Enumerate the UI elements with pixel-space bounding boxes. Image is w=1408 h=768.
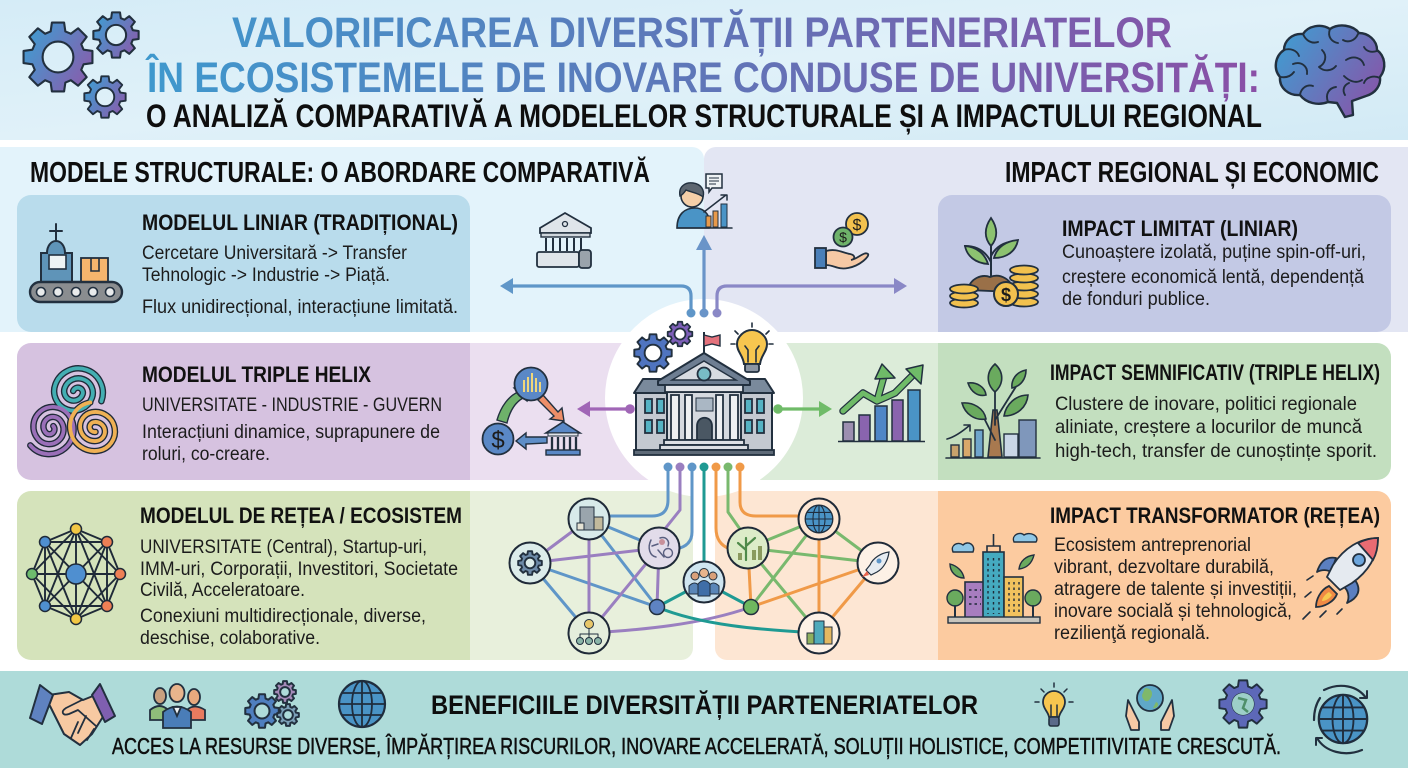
panel: transformative impact: [938, 491, 1391, 660]
icon: green city: [947, 533, 1041, 623]
door: [697, 418, 712, 442]
card text: roluri, co-creare.: [142, 443, 270, 465]
card text: [140, 536, 458, 649]
card text: aliniate, creștere a locurilor de muncă: [1055, 416, 1362, 438]
card text: creștere economică lentă, dependență: [1062, 266, 1364, 288]
icon: header gears: [24, 12, 139, 118]
arrow: to limited impact: [712, 278, 907, 318]
title: VALORIFICAREA DIVERSITĂȚII PARTENERIATELOR: [232, 9, 1172, 57]
card text: Flux unidirecțional, interacțiune limitată.: [142, 296, 458, 318]
arrow: to growth chart: [773, 401, 832, 417]
flag: [704, 332, 720, 354]
node: hierarchy: [568, 612, 610, 654]
card text: Civilă, Acceleratoare.: [140, 579, 305, 601]
panel: benefits footer: [0, 671, 1408, 768]
icon: hand with coins: [815, 213, 868, 268]
section heading: models: MODELE STRUCTURALE: O ABORDARE COMPARATIVĂ: [30, 156, 650, 189]
card text: inovare socială și tehnologică,: [1054, 600, 1292, 622]
card text: atragere de talente și investiții,: [1054, 578, 1297, 600]
footer title: BENEFICIILE DIVERSITĂȚII PARTENERIATELOR: [431, 689, 978, 720]
icon: globe: [339, 681, 385, 727]
arrow: to triple helix cycle: [577, 401, 635, 417]
icon: university gears: [634, 322, 692, 372]
node: industry: [568, 498, 610, 540]
blue links: [530, 519, 659, 633]
card text: Clustere de inovare, politici regionale: [1055, 393, 1357, 415]
card text: Interacțiuni dinamice, suprapunere de: [142, 421, 440, 443]
icon: hands holding globe: [1126, 685, 1174, 730]
node: plant chart: [728, 528, 768, 568]
title: ÎN ECOSISTEMELE DE INOVARE CONDUSE DE UNIVERSITĂȚI:: [145, 53, 1260, 102]
node: globe: [798, 498, 840, 540]
icon: people group: [150, 684, 205, 728]
title: [145, 9, 1262, 134]
icon: cycle of triple helix actors: $: [491, 427, 505, 454]
card text: Cercetare Universitară -> Transfer: [142, 242, 407, 264]
icon: light bulb: [1035, 683, 1073, 726]
card title: MODELUL LINIAR (TRADIȚIONAL): [142, 210, 458, 235]
card title: IMPACT LIMITAT (LINIAR): [1062, 216, 1298, 241]
icon: three gears: [245, 681, 299, 728]
green links: [748, 519, 878, 633]
card title: MODELUL TRIPLE HELIX: [142, 362, 371, 387]
icon: globe with arrows: [1314, 686, 1367, 753]
arrow: up to researcher: [696, 235, 712, 318]
icon: conveyor with box: [30, 224, 122, 302]
hub small blue: [650, 600, 664, 614]
icon: rocket: [1303, 538, 1378, 619]
icon: network mesh: [26, 524, 126, 624]
card text: Cunoaștere izolată, puține spin-off-uri,: [1062, 241, 1366, 263]
card text: de fonduri publice.: [1062, 288, 1210, 310]
icon: gear with globe: [1219, 680, 1267, 728]
card text: [142, 394, 442, 465]
card text: vibrant, dezvoltare durabilă,: [1054, 556, 1274, 578]
card text: [1062, 241, 1366, 310]
node: people: [684, 562, 724, 602]
header band: [0, 0, 1408, 140]
icon: university light bulb: [731, 323, 773, 372]
card text: IMM-uri, Corporații, Investitori, Societate: [140, 558, 458, 580]
arrow: to traditional model: [500, 278, 696, 318]
card text: rezilienţă regională.: [1054, 622, 1210, 644]
centre block: [667, 392, 741, 442]
card text: UNIVERSITATE - INDUSTRIE - GUVERN: [142, 394, 442, 416]
card text: UNIVERSITATE (Central), Startup-uri,: [140, 536, 427, 558]
card text: [1054, 534, 1297, 644]
card text: [142, 242, 458, 318]
panel: regional impact background: [704, 147, 1408, 332]
connectors: [600, 467, 805, 565]
card text: Ecosistem antreprenorial: [1054, 534, 1251, 556]
icon: handshake: [30, 684, 115, 745]
icon: brain: [1276, 26, 1384, 117]
row 3 left extension: [470, 491, 693, 660]
node: people and ideas: [638, 528, 680, 568]
row 3 right extension: [715, 491, 938, 660]
icon: tree with city: [946, 364, 1040, 458]
purple links: [530, 519, 751, 633]
icon: researcher with chart: [677, 174, 732, 228]
card text: high-tech, transfer de cunoștințe sporit.: [1055, 440, 1377, 462]
panel: structural models background: [0, 147, 704, 332]
central white circle: [605, 299, 803, 497]
teal links: [657, 582, 819, 633]
icon: institution building with machinery: [537, 213, 591, 268]
icon: hand with coins: $: [853, 217, 862, 234]
row 2 right extension: [760, 343, 938, 480]
hub small green: [744, 600, 758, 614]
icon: triple spiral: [18, 361, 118, 464]
pediment: [658, 353, 750, 385]
icon: plant and coins: $: [1001, 285, 1011, 305]
node: startup gear: [510, 542, 550, 584]
card title: MODELUL DE REȚEA / ECOSISTEM: [140, 503, 462, 528]
panel: linear model: [17, 195, 470, 332]
wings: [634, 379, 774, 451]
card text: Conexiuni multidirecționale, diverse,: [140, 605, 426, 627]
chart: network connectors and links: [530, 467, 878, 633]
card text: [1055, 393, 1377, 462]
orange links: [748, 519, 878, 633]
row 2 left extension: [470, 343, 650, 480]
icon: cycle of triple helix actors: [482, 368, 580, 455]
node: city: [798, 612, 840, 654]
panel: network model: [17, 491, 470, 660]
card text: deschise, colaborative.: [140, 627, 320, 649]
icon: university building: [634, 322, 774, 455]
panel: significant impact: [938, 343, 1391, 480]
icon: plant and coins: [950, 218, 1038, 308]
icon: hand with coins: $: [839, 229, 847, 245]
icon: growth chart: [838, 364, 925, 442]
node: rocket: [858, 542, 898, 584]
columns: [671, 395, 738, 440]
panel: triple helix model: [17, 343, 470, 480]
card text: Tehnologic -> Industrie -> Piață.: [142, 264, 390, 286]
steps: [634, 440, 774, 455]
dots of network connectors: [664, 462, 744, 472]
wing windows: [645, 399, 764, 433]
panel: limited impact: [938, 195, 1391, 332]
